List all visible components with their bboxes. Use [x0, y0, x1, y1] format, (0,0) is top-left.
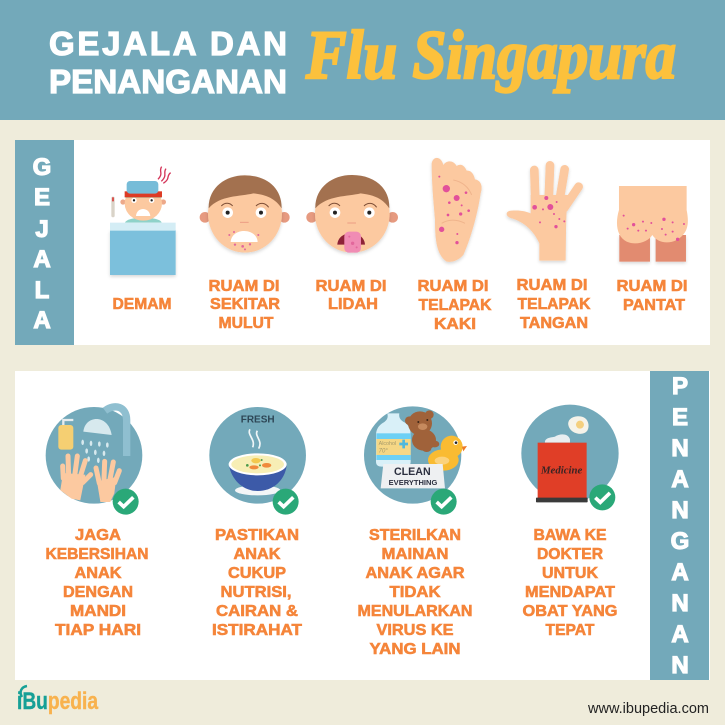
label: demam: DEMAM	[112, 296, 172, 313]
icon: fresh soup bowl: FRESH	[241, 415, 275, 426]
label: ruam di lidah	[316, 278, 386, 313]
label: ruam di sekitar mulut: RUAM DI	[208, 278, 280, 295]
label: pastikan nutrisi	[212, 527, 302, 639]
label: pastikan nutrisi: CUKUP	[228, 565, 286, 582]
icon: shower and hand washing	[46, 407, 142, 515]
label: sterilkan mainan: ANAK AGAR	[366, 565, 465, 582]
label: ruam di telapak kaki: RUAM DI	[418, 278, 488, 295]
label: pastikan nutrisi: ISTIRAHAT	[212, 622, 302, 639]
label: bawa ke dokter	[522, 527, 618, 639]
icon: clean toys and alcohol: EVERYTHING	[389, 478, 437, 487]
label: pastikan nutrisi: PASTIKAN	[215, 527, 299, 544]
penanganan side heading: P	[672, 373, 688, 400]
gejala side heading: E	[34, 184, 50, 211]
penanganan side heading: N	[671, 652, 689, 679]
label: sterilkan mainan: MAINAN	[382, 546, 448, 563]
penanganan side heading: A	[671, 466, 689, 493]
icon: clean toys and alcohol: 70°	[379, 449, 388, 455]
penanganan side heading: N	[671, 497, 689, 524]
label: bawa ke dokter: MENDAPAT	[525, 584, 615, 601]
label: ruam di telapak kaki: KAKI	[434, 316, 476, 333]
label: ruam di lidah: LIDAH	[328, 296, 378, 313]
label: jaga kebersihan: KEBERSIHAN	[46, 546, 148, 563]
label: ruam di telapak tangan: TELAPAK	[518, 296, 591, 313]
label: ruam di telapak tangan: RUAM DI	[516, 277, 588, 294]
panel: penanganan	[15, 371, 710, 680]
label: jaga kebersihan	[46, 527, 148, 639]
label: jaga kebersihan: TIAP HARI	[55, 622, 141, 639]
icon: hand palm with rash	[507, 165, 579, 261]
label: ruam di telapak kaki: TELAPAK	[418, 297, 492, 314]
label: jaga kebersihan: DENGAN	[63, 584, 133, 601]
label: sterilkan mainan: YANG LAIN	[370, 641, 460, 658]
label: bawa ke dokter: TEPAT	[546, 622, 595, 639]
header banner	[0, 0, 725, 120]
panel: gejala	[15, 140, 710, 345]
label: bawa ke dokter: BAWA KE	[534, 527, 607, 544]
label: jaga kebersihan: ANAK	[74, 565, 122, 582]
label: jaga kebersihan: JAGA	[75, 527, 121, 544]
icon: check badge	[431, 489, 457, 515]
gejala side heading	[15, 140, 74, 345]
icon: fresh soup bowl	[209, 407, 306, 515]
label: ruam di telapak tangan: TANGAN	[520, 315, 588, 332]
icon: check badge	[113, 489, 139, 515]
penanganan side heading: A	[671, 621, 689, 648]
label: ruam di telapak kaki	[418, 278, 492, 333]
icon: clean toys and alcohol: Alcohol	[379, 441, 396, 447]
penanganan side heading: N	[671, 435, 689, 462]
icon: check badge	[273, 489, 299, 515]
title: gejala dan penanganan: GEJALA DAN	[49, 25, 287, 62]
penanganan side heading: A	[671, 559, 689, 586]
label: ruam di pantat: PANTAT	[623, 297, 685, 314]
title: gejala dan penanganan	[49, 25, 287, 100]
label: ruam di sekitar mulut: MULUT	[218, 315, 274, 332]
icon: foot sole with rash	[432, 158, 482, 262]
label: sterilkan mainan: STERILKAN	[369, 527, 461, 544]
title: flu singapura: Flu Singapura	[305, 17, 676, 93]
label: ruam di sekitar mulut	[208, 278, 280, 332]
gejala side heading: G	[33, 154, 51, 181]
website url: www.ibupedia.com	[587, 700, 709, 717]
icon: medicine box	[521, 405, 619, 510]
gejala side heading: A	[33, 307, 51, 334]
penanganan side heading: G	[671, 528, 689, 555]
gejala side heading: A	[33, 246, 51, 273]
label: bawa ke dokter: DOKTER	[537, 546, 603, 563]
label: ruam di sekitar mulut: SEKITAR	[210, 296, 280, 313]
gejala side heading: L	[35, 277, 49, 304]
icon: face with rash around mouth	[200, 175, 290, 253]
icon: medicine box: Medicine	[540, 464, 582, 476]
label: ruam di lidah: RUAM DI	[316, 278, 386, 295]
icon: clean toys and alcohol	[364, 406, 467, 515]
icon: check badge	[589, 484, 615, 510]
logo: ibupedia: iBupedia	[17, 688, 99, 715]
label: pastikan nutrisi: NUTRISI,	[220, 584, 292, 601]
label: pastikan nutrisi: CAIRAN &	[216, 603, 298, 620]
gejala side heading: J	[35, 216, 49, 243]
label: sterilkan mainan	[358, 527, 472, 658]
title: gejala dan penanganan: PENANGANAN	[49, 63, 287, 100]
label: bawa ke dokter: OBAT YANG	[522, 603, 618, 620]
label: ruam di pantat: RUAM DI	[616, 278, 688, 295]
icon: clean toys and alcohol: CLEAN	[394, 466, 431, 478]
icon: buttocks with rash	[617, 186, 688, 262]
label: bawa ke dokter: UNTUK	[542, 565, 598, 582]
icon: face with rash on tongue	[306, 175, 398, 253]
penanganan side heading	[650, 371, 709, 680]
penanganan side heading: E	[672, 404, 688, 431]
label: sterilkan mainan: VIRUS KE	[376, 622, 454, 639]
penanganan side heading: N	[671, 590, 689, 617]
label: sterilkan mainan: MENULARKAN	[358, 603, 472, 620]
label: ruam di telapak tangan	[516, 277, 591, 332]
label: jaga kebersihan: MANDI	[70, 603, 126, 620]
icon: fever child in bed	[110, 167, 176, 275]
label: pastikan nutrisi: ANAK	[234, 546, 281, 563]
label: sterilkan mainan: TIDAK	[390, 584, 441, 601]
label: ruam di pantat	[616, 278, 688, 314]
